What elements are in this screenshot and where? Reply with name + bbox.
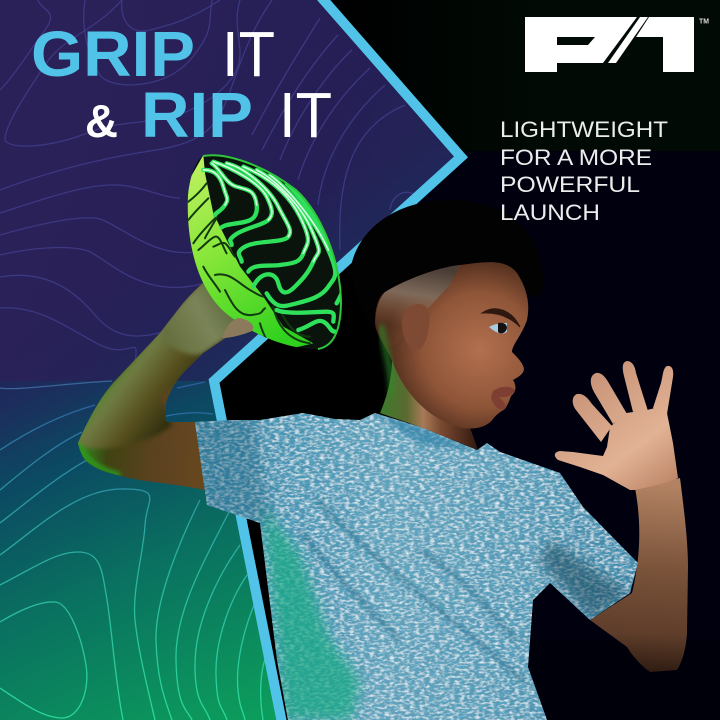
tagline: LIGHTWEIGHT [500,117,668,142]
eye [489,323,507,334]
mouth [491,387,515,409]
boy: raised hand [555,361,678,490]
headline [31,18,332,151]
boy: raised forearm [590,478,688,672]
neon contour lines [203,162,343,332]
green light on shirt [262,505,360,720]
ball rim [203,155,341,349]
arrow outline [214,0,461,720]
headline: IT [222,18,275,90]
headline: IT [279,79,332,151]
green rim light [381,325,392,395]
ear [402,304,429,350]
dark lines on green panel [188,183,310,343]
headline: & [85,95,118,147]
boy: throwing arm [78,283,234,490]
brow [482,309,520,327]
headline: GRIP [31,18,195,90]
boy: hair [352,200,543,335]
headline: RIP [141,79,253,151]
P1 logo [525,17,709,72]
tagline: POWERFUL [500,172,640,197]
boy: thumb on ball [222,318,253,338]
trademark: TM [699,18,709,26]
tagline: FOR A MORE [500,145,652,170]
bright line cores [203,162,328,262]
neon green side panel [183,155,313,353]
tagline [500,117,668,225]
football [183,155,343,353]
panel: topographic gradient arrow [0,0,461,720]
contour lines [0,0,415,720]
faded hair [376,265,460,346]
tagline: LAUNCH [500,200,600,225]
shirt wrinkles [300,500,525,682]
boy: head and neck [375,262,528,450]
boy: t-shirt [185,413,638,720]
